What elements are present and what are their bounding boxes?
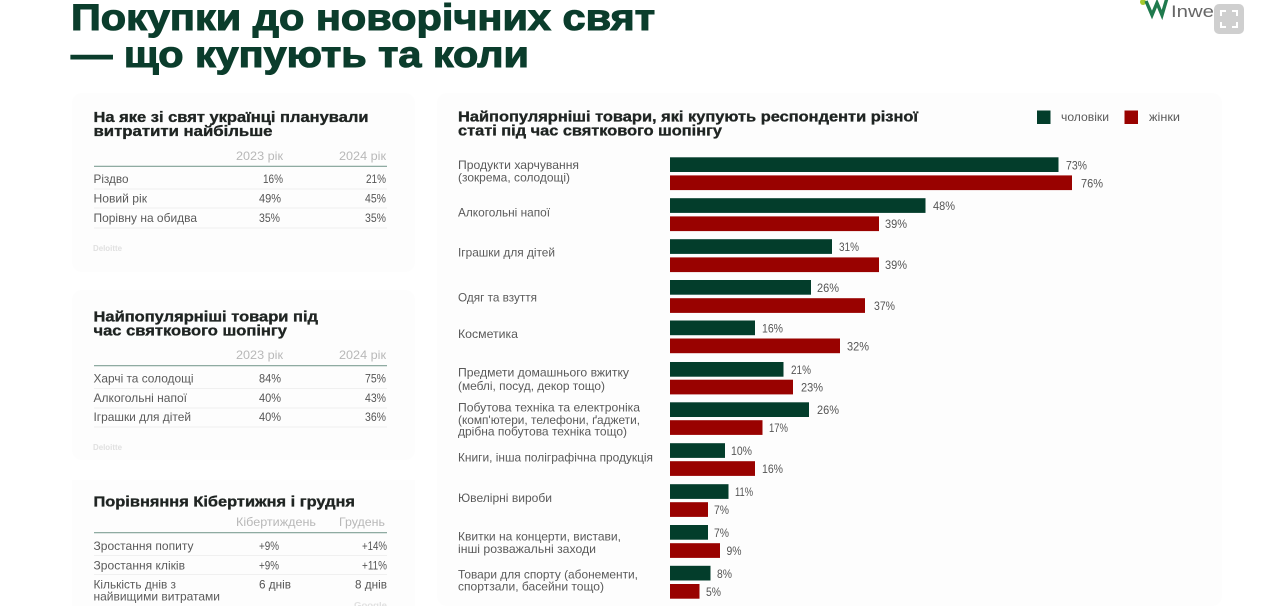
table: holiday spending: 49% (259, 192, 281, 206)
table: holiday spending: 35% (365, 211, 386, 225)
table: popular goods: Харчі та солодощі (94, 371, 194, 385)
bar value labels: 17% (769, 421, 788, 435)
heading: holiday spending (94, 110, 368, 140)
table: popular goods: 84% (259, 371, 281, 385)
bar value labels: 26% (817, 281, 839, 295)
title: — що купують та коли (71, 34, 529, 75)
table: Cyber week vs December: Зростання кліків (94, 558, 185, 572)
table: holiday spending: 21% (366, 172, 386, 186)
legend: чоловіки (1061, 110, 1109, 124)
table: popular goods (94, 348, 387, 427)
bar value labels (706, 158, 1103, 599)
category labels: Побутова техніка та електроніка (458, 401, 640, 415)
bar value labels: 37% (874, 299, 895, 313)
legend: жінки (1149, 110, 1180, 124)
source: Deloitte: Deloitte (93, 443, 123, 452)
bar value labels: 7% (714, 503, 729, 517)
table: holiday spending: Різдво (94, 172, 129, 186)
bar value labels: 9% (726, 544, 742, 558)
category labels: (комп'ютери, телефони, ґаджети, (458, 413, 640, 427)
bar value labels: 39% (885, 217, 907, 231)
table: holiday spending: 16% (263, 172, 283, 186)
category labels: Алкогольні напої (458, 205, 551, 219)
bar value labels: 21% (791, 363, 811, 377)
table: holiday spending: 45% (365, 192, 386, 206)
category labels: дрібна побутова техніка тощо) (458, 424, 627, 438)
table: Cyber week vs December: Грудень (339, 515, 385, 529)
category labels: (зокрема, солодощі) (458, 171, 570, 185)
bar value labels: 8% (717, 567, 732, 581)
panel: holiday spending (72, 93, 415, 272)
table: holiday spending: 2023 рік (236, 149, 284, 163)
bar value labels: 26% (817, 403, 839, 417)
table: Cyber week vs December: Зростання попиту (94, 539, 194, 553)
table: Cyber week vs December: +9% (259, 558, 279, 572)
legend (1037, 110, 1180, 124)
heading: goods by gender (458, 110, 919, 140)
category labels: Предмети домашнього вжитку (458, 366, 629, 380)
panel: popular goods (72, 290, 415, 460)
panel: Cyber week vs December (72, 480, 415, 606)
category labels (458, 158, 653, 594)
bar value labels: 11% (735, 485, 753, 499)
category labels: Косметика (458, 327, 518, 341)
bar value labels: 10% (731, 444, 752, 458)
heading: holiday spending: витратити найбільше (94, 124, 272, 140)
bar value labels: 23% (801, 380, 823, 394)
category labels: Іграшки для дітей (458, 245, 555, 259)
panel: goods by gender (437, 93, 1222, 606)
table: Cyber week vs December: 8 днів (355, 577, 387, 591)
table: popular goods: 2023 рік (236, 348, 284, 362)
category labels: Книги, інша поліграфічна продукція (458, 451, 653, 465)
bar value labels: 16% (762, 322, 783, 336)
bar value labels: 31% (839, 240, 859, 254)
table: popular goods: 2024 рік (339, 348, 387, 362)
heading: Cyber week vs December: Порівняння Кібертижня і грудня (94, 495, 355, 511)
table: holiday spending: Порівну на обидва (94, 211, 197, 225)
bar value labels: 48% (933, 199, 955, 213)
heading: goods by gender: статі під час святкового шопінгу (458, 124, 722, 140)
table: Cyber week vs December: +9% (259, 539, 279, 553)
table: popular goods: Алкогольні напої (94, 391, 188, 405)
bar value labels: 76% (1081, 176, 1103, 190)
bar value labels: 39% (885, 258, 907, 272)
table: popular goods: Іграшки для дітей (94, 410, 191, 424)
table: popular goods: 43% (365, 391, 386, 405)
category labels: Продукти харчування (458, 158, 579, 172)
table: holiday spending: Новий рік (94, 192, 148, 206)
category labels: інші розважальні заходи (458, 542, 596, 556)
table: holiday spending: 35% (259, 211, 280, 225)
category labels: Одяг та взуття (458, 291, 537, 305)
icon: fullscreen button (1214, 4, 1244, 34)
bar value labels: 5% (706, 585, 721, 599)
category labels: Квитки на концерти, вистави, (458, 530, 621, 544)
heading: holiday spending: На яке зі свят українці планували (94, 110, 368, 126)
bar chart (670, 157, 1072, 599)
table: popular goods: 40% (259, 410, 281, 424)
table: popular goods: 36% (365, 410, 386, 424)
table: Cyber week vs December: +11% (362, 558, 387, 572)
heading: popular goods: час святкового шопінгу (94, 324, 287, 340)
heading: popular goods: Найпопулярніші товари під (94, 310, 318, 326)
table: Cyber week vs December: 6 днів (259, 577, 291, 591)
title (71, 0, 655, 75)
table: holiday spending: 2024 рік (339, 149, 387, 163)
category labels: (меблі, посуд, декор тощо) (458, 379, 605, 393)
table: popular goods: 40% (259, 391, 281, 405)
category labels: Товари для спорту (абонементи, (458, 567, 638, 581)
table: Cyber week vs December (94, 515, 387, 604)
table: Cyber week vs December: Кібертиждень (236, 515, 316, 529)
table: Cyber week vs December: Кількість днів з (94, 577, 176, 591)
bar value labels: 16% (762, 462, 783, 476)
table: Cyber week vs December: найвищими витратами (94, 590, 220, 604)
source: Deloitte: Deloitte (93, 244, 123, 253)
table: popular goods: 75% (365, 371, 386, 385)
table: Cyber week vs December: +14% (362, 539, 387, 553)
category labels: Ювелірні вироби (458, 491, 552, 505)
category labels: спортзали, басейни тощо) (458, 580, 604, 594)
table: holiday spending (94, 149, 387, 228)
heading: popular goods (94, 310, 318, 340)
bar value labels: 73% (1066, 158, 1087, 172)
bar value labels: 32% (847, 340, 869, 354)
bar value labels: 7% (714, 526, 729, 540)
icon: Inwe logo (1140, 0, 1214, 21)
heading: goods by gender: Найпопулярніші товари, які купують респонденти різної (458, 110, 919, 126)
icon: Inwe logo: Inwe (1171, 2, 1214, 21)
